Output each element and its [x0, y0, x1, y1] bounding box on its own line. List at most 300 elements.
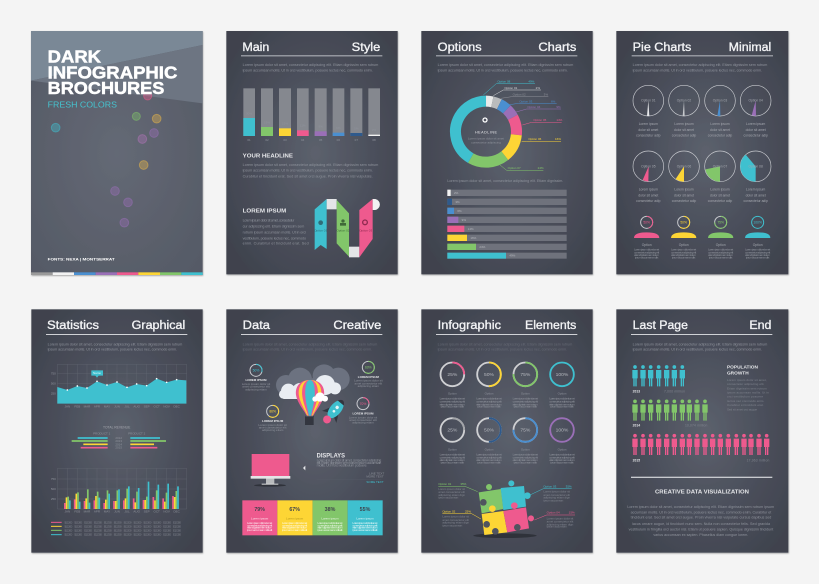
- displays text: Lorem ipsum dolor sit amet, consectetur adipiscing: [317, 459, 381, 463]
- intro text: [243, 63, 378, 73]
- displays text: MORE TEXT: [366, 475, 384, 479]
- ring row one text: consectetur adipiscing elit: [549, 400, 575, 404]
- population growth text: ipsum accumsan mollis. Ut in: [727, 390, 769, 394]
- ring row two text: consectetur adipiscing elit: [513, 455, 538, 459]
- heading: [631, 318, 772, 335]
- puzzle callouts: adipiscing etiam dign: [547, 522, 574, 526]
- gauge captions: consectetur adipiscing elit: [671, 250, 696, 254]
- colored stat boxes: consectetur adipiscing elit: [282, 523, 307, 527]
- bottom text: varius accumsan ex sapien. Phasellus diam congue lorem.: [653, 533, 748, 537]
- puzzle callouts: adipiscing etiam dign: [438, 493, 465, 497]
- grouped bar chart: SEP: [144, 510, 150, 514]
- intro text: Lorem ipsum dolor sit amet, consectetur adipiscing elit. Etiam dignissim sem rutrum: [438, 63, 573, 67]
- puzzle callouts: [438, 482, 575, 529]
- pie row two text: [636, 188, 768, 203]
- lorem ipsum block: Lorem ipsum dolor sit amet, consectetur: [243, 218, 295, 222]
- gauge callouts: amet consectetur elit: [355, 381, 382, 385]
- horizontal bars: 49%: [509, 254, 516, 258]
- ring row two text: Lorem ipsum dolor sit amet: [513, 453, 538, 457]
- gauge callouts: 86%: [269, 410, 276, 414]
- ring row two text: consectetur adipiscing elit: [476, 455, 502, 459]
- gauge captions: etiam dignissim sem rutrum: [634, 253, 660, 257]
- color strip: [31, 272, 203, 275]
- gauge captions: consectetur adipiscing elit: [634, 250, 659, 254]
- horizontal bars: 24%: [479, 245, 486, 249]
- colored stat boxes: consectetur adipiscing elit: [247, 523, 272, 527]
- pictogram row 2013: [632, 365, 685, 394]
- pie row one: Option 03: [713, 99, 727, 103]
- ring row two text: etiam dignissim sem rutrum: [440, 458, 465, 462]
- colored stat boxes: 38%: [325, 507, 336, 513]
- horizontal bars: 14%: [468, 227, 474, 231]
- ring row one: 25%: [447, 372, 458, 378]
- ring row two: [440, 418, 574, 442]
- leader labels: Option 06: [528, 137, 542, 141]
- ring row two text: Option: [448, 447, 457, 451]
- leader labels: Option 01: [504, 86, 518, 90]
- bokeh dots: [51, 92, 161, 227]
- pie row two text: Lorem ipsum: [674, 188, 694, 192]
- ring row one text: Option: [485, 392, 494, 396]
- ring row two: 75%: [520, 428, 531, 434]
- colored stat boxes: ipsum accumsan mollis elit: [282, 528, 307, 532]
- panel: main style: [226, 31, 398, 274]
- population growth text: Lorem ipsum dolor sit amet,: [727, 378, 767, 382]
- displays text: SOME TEXT: [366, 480, 384, 484]
- colored stat boxes: Lorem ipsum: [286, 517, 304, 521]
- bar chart: 2%: [372, 128, 376, 132]
- puzzle callouts: Option 04: [547, 511, 560, 515]
- leader labels: Option 07: [508, 166, 521, 170]
- ring row two text: Option: [521, 447, 530, 451]
- gauge captions: Lorem ipsum dolor sit amet: [634, 248, 659, 252]
- panel: cover: [31, 31, 203, 275]
- leader labels: 3%: [544, 93, 548, 97]
- ring row one text: Lorem ipsum dolor sit amet: [440, 397, 465, 401]
- gauge captions: etiam dignissim sem rutrum: [671, 253, 697, 257]
- bar chart: 03: [283, 138, 287, 142]
- grouped bar chart: OCT: [154, 510, 160, 514]
- heading: Infographic: [438, 318, 501, 332]
- ring row one: [440, 362, 574, 386]
- pie row one text: dolor sit amet: [638, 128, 658, 132]
- displays text: LINE TEXT: [369, 471, 384, 475]
- colored stat boxes: 79%: [254, 507, 265, 513]
- bar chart: 5%: [354, 126, 359, 130]
- puzzle callouts: amet consectetur elit: [547, 520, 573, 524]
- bar chart: 07: [355, 138, 358, 142]
- horizontal bars: 6%: [457, 209, 462, 213]
- cover subtitle: FRESH COLORS: [48, 99, 117, 109]
- colored stat boxes: 67%: [289, 507, 300, 513]
- bar chart: 08: [372, 138, 376, 142]
- lorem ipsum block: vestibulum, posuere lectus nec, commodo: [243, 236, 306, 240]
- leader labels: Option 05: [533, 118, 547, 122]
- data table: $12,300 $12,300 $12,300 $12,300 $12,300 $12,300 $12,300 $12,300 $12,300 $12,300 $12,300 $12,300: [64, 520, 181, 524]
- ribbon infographic: [314, 199, 380, 257]
- pictogram row 2015: 17,963 million: [747, 458, 769, 462]
- intro text: ipsum accumsan mollis. Ut in orci vestibulum, posuere lectus nec, commodo enim.: [438, 69, 568, 73]
- chart callout: Name: [93, 371, 101, 375]
- intro text: Lorem ipsum dolor sit amet, consectetur adipiscing elit. Etiam dignissim sem rutrum: [438, 342, 572, 346]
- gauge callouts: Lorem ipsum dolor sit: [258, 423, 287, 427]
- horizontal bars: [447, 190, 567, 259]
- heading: Minimal: [729, 40, 771, 54]
- pie row two text: dolor sit amet: [710, 193, 730, 197]
- puzzle callouts: Option 02: [442, 509, 456, 513]
- panel: pie charts minimal: [616, 31, 788, 274]
- gauge captions: Option: [753, 243, 763, 247]
- your headline: YOUR HEADLINE: [243, 153, 293, 159]
- leader lines: [483, 83, 562, 170]
- intro text: [633, 63, 767, 73]
- puzzle callouts: 15%: [569, 511, 575, 515]
- heading: Options: [438, 40, 482, 54]
- gauge callouts: LOREM IPSUM: [352, 411, 374, 415]
- ring row two text: ipsum accumsan mollis: [550, 461, 574, 465]
- colored stat boxes: etiam dignissim sem rutrum: [247, 526, 273, 530]
- your headline: ipsum accumsan mollis. Ut in orci vestibulum, posuere lectus nec, commodo enim.: [243, 169, 373, 173]
- bar chart: 30%: [246, 111, 252, 115]
- grouped bar chart: NOV: [163, 510, 170, 514]
- ribbon icons: Option 02: [337, 229, 350, 233]
- gauges on mounds: 50%: [643, 221, 650, 225]
- displays text: mollis. Ut in orci vestibulum posuere: [317, 464, 367, 468]
- lorem ipsum block: rutrum ipsum accumsan mollis. Ut in orci: [243, 230, 306, 234]
- ring row two text: Lorem ipsum dolor sit amet: [549, 453, 575, 457]
- colored stat boxes: Lorem ipsum: [251, 517, 269, 521]
- pie row one text: Lorem ipsum: [674, 122, 694, 126]
- gauges on mounds: 50%: [680, 221, 687, 225]
- pictogram row 2015: [632, 434, 769, 462]
- gauge callouts: Lorem ipsum dolor sit: [354, 379, 383, 383]
- panel: data creative: [226, 309, 398, 553]
- bottom text: tincidunt erat. Sed sit amet orci augue. Proin viverra nisi vulputate cursus dapibus sed: [631, 516, 771, 520]
- area chart: FEB: [74, 405, 80, 409]
- colored stat boxes: [242, 500, 383, 535]
- area chart: OCT: [154, 405, 160, 409]
- area chart: 750: [51, 372, 56, 376]
- pie row two: Option 07: [713, 164, 727, 168]
- grouped bar chart: MAY: [104, 510, 110, 514]
- ring row one text: ipsum accumsan mollis: [477, 405, 501, 409]
- gauge captions: ipsum accumsan mollis: [746, 256, 770, 260]
- colored stat boxes: etiam dignissim sem rutrum: [317, 526, 343, 530]
- ring row two text: ipsum accumsan mollis: [441, 461, 464, 465]
- lorem ipsum block: cur adipiscing elit. Etiam dignissim sem: [243, 224, 304, 228]
- population growth text: consectetur adipiscing elit.: [727, 382, 764, 386]
- bar chart: 01: [247, 138, 251, 142]
- colored stat boxes: Lorem ipsum: [356, 517, 374, 521]
- area chart: [51, 364, 187, 409]
- bottom heading: CREATIVE DATA VISUALIZATION: [655, 490, 749, 496]
- rocket: [317, 395, 350, 429]
- puzzle callouts: ipsum accumsan: [547, 525, 567, 529]
- area chart: DEC: [174, 405, 181, 409]
- gauge captions: ipsum accumsan mollis: [635, 256, 659, 260]
- clouds: [276, 364, 350, 399]
- heading: Main: [242, 40, 269, 54]
- ring row two text: etiam dignissim sem rutrum: [476, 458, 502, 462]
- ring row one text: etiam dignissim sem rutrum: [440, 402, 465, 406]
- population growth text: GROWTH: [727, 370, 749, 375]
- colored stat boxes: ipsum accumsan mollis elit: [352, 528, 378, 532]
- colored stat boxes: ipsum accumsan mollis elit: [317, 528, 343, 532]
- bar chart: 6%: [336, 126, 341, 130]
- population growth text: lectus nec commodo enim.: [727, 399, 764, 403]
- intro text: ipsum accumsan mollis. Ut in orci vestibulum, posuere lectus nec, commodo enim.: [438, 348, 567, 352]
- grouped bar chart: JUN: [114, 510, 120, 514]
- displays text: elit. Etiam dignissim sem rutrum ipsum accumsan: [317, 461, 381, 465]
- population growth text: [727, 365, 769, 411]
- population growth text: Curabitur et tincidunt erat.: [727, 403, 764, 407]
- heading: [632, 40, 773, 56]
- ribbon icons: [314, 219, 372, 233]
- pie row one text: Lorem ipsum: [710, 122, 730, 126]
- ring row one text: ipsum accumsan mollis: [441, 405, 464, 409]
- intro text: ipsum accumsan mollis. Ut in orci vestibulum, posuere lectus nec, commodo enim.: [243, 348, 372, 352]
- gauge callouts: [242, 361, 383, 432]
- cover title: INFOGRAPHIC: [48, 62, 178, 82]
- pictogram row 2015: 2015: [633, 458, 640, 462]
- intro text: [633, 342, 767, 352]
- gauge captions: etiam dignissim sem rutrum: [745, 253, 771, 257]
- bar chart: 05: [319, 138, 323, 142]
- pie row two text: dolor sit amet: [746, 193, 766, 197]
- puzzle callouts: ipsum accumsan: [442, 523, 463, 527]
- ring row one text: Lorem ipsum dolor sit amet: [549, 397, 575, 401]
- area chart: NOV: [163, 405, 170, 409]
- heading: Creative: [333, 318, 382, 332]
- gauge captions: Option: [642, 243, 652, 247]
- ring row one text: Lorem ipsum dolor sit amet: [513, 397, 538, 401]
- ring row one text: consectetur adipiscing elit: [440, 400, 465, 404]
- monitor: [251, 454, 290, 487]
- ring row one text: Lorem ipsum dolor sit amet: [476, 397, 502, 401]
- gauge captions: Lorem ipsum dolor sit amet: [708, 248, 733, 252]
- ribbon icons: Option 03: [359, 229, 372, 233]
- heading: Style: [352, 40, 381, 54]
- intro text: Lorem ipsum dolor sit amet, consectetur adipiscing elit. Etiam dignissim sem rutrum: [633, 63, 767, 67]
- ring row two text: [440, 447, 575, 465]
- gauge captions: [634, 243, 771, 260]
- bar chart: 9%: [319, 125, 323, 129]
- divider: [631, 477, 772, 478]
- bottom text: lacus ornare augue, id tincidunt nunc sem. Nulla non consectetur felis. Sed gravida: [632, 522, 771, 526]
- population growth text: orci vestibulum posuere: [727, 395, 763, 399]
- colored stat boxes: 55%: [360, 507, 371, 513]
- leader labels: 14%: [556, 118, 563, 122]
- colored stat boxes: Lorem ipsum dolor sit amet: [282, 521, 307, 525]
- bar chart: [243, 88, 380, 142]
- donut center: Lorem ipsum dolor sit amet: [468, 137, 504, 141]
- pie row two text: dolor sit amet: [638, 193, 658, 197]
- caption: Lorem ipsum dolor sit amet, consectetur adipiscing elit. Etiam dignissim.: [447, 179, 563, 183]
- ring row two text: etiam dignissim sem rutrum: [549, 458, 575, 462]
- ring row one: 100%: [556, 372, 569, 378]
- pie row one text: [636, 122, 768, 138]
- colored stat boxes: Lorem ipsum: [321, 517, 339, 521]
- ring row one text: Option: [521, 392, 530, 396]
- heading: End: [749, 318, 771, 332]
- pie row one: [633, 85, 771, 116]
- ring row one text: ipsum accumsan mollis: [514, 405, 537, 409]
- gauge callouts: 60%: [365, 366, 372, 370]
- pie row one text: dolor sit amet: [746, 128, 766, 132]
- bottom text: [627, 505, 774, 537]
- gauges on mounds: 75%: [717, 221, 724, 225]
- horizontal bars: 9%: [462, 218, 466, 222]
- bottom text: vestibulum in fringilla orci auctor nisi. Etiam ut posuere sapien. Quisque dignissim tincidunt: [629, 527, 773, 531]
- ring row one text: consectetur adipiscing elit: [513, 400, 538, 404]
- heading: Last Page: [633, 318, 688, 332]
- grouped bar chart: MAR: [84, 510, 91, 514]
- pie row two: Option 06: [677, 164, 691, 168]
- ring row one: 75%: [520, 372, 531, 378]
- puzzle callouts: 35%: [566, 484, 572, 488]
- leader labels: Option 03: [519, 99, 533, 103]
- area chart: MAY: [104, 405, 110, 409]
- intro text: [243, 342, 377, 352]
- cover title: [48, 46, 178, 98]
- colored stat boxes: consectetur adipiscing elit: [317, 523, 343, 527]
- panel: last page end: [616, 309, 788, 553]
- grouped bar chart: JUL: [124, 510, 130, 514]
- grouped bar chart: FEB: [74, 510, 80, 514]
- heading: Charts: [538, 40, 576, 54]
- intro text: [438, 63, 573, 73]
- leader labels: 2%: [536, 86, 540, 90]
- grouped bar chart: [51, 468, 187, 514]
- ring row one text: consectetur adipiscing elit: [476, 400, 502, 404]
- gauge captions: Option: [716, 243, 726, 247]
- bar chart: 04: [301, 138, 305, 142]
- grouped bar chart: APR: [94, 510, 101, 514]
- lorem ipsum block: [243, 209, 309, 246]
- pie row two text: Lorem ipsum: [746, 188, 766, 192]
- pie row one: Option 02: [677, 99, 691, 103]
- puzzle: [473, 480, 537, 538]
- donut center: HEADLINE: [475, 130, 498, 134]
- pie row one text: consectetur adip: [743, 134, 768, 138]
- pie row one text: consectetur adip: [636, 134, 661, 138]
- heading: [241, 40, 382, 56]
- data table: $12,300 $12,300 $12,300 $12,300 $12,300 $12,300 $12,300 $12,300 $12,300 $12,300 $12,300 $12,300: [64, 528, 181, 532]
- intro text: Lorem ipsum dolor sit amet, consectetur adipiscing elit. Etiam dignissim sem rutrum: [243, 63, 378, 67]
- bar chart: 02: [265, 138, 269, 142]
- intro text: ipsum accumsan mollis. Ut in orci vestibulum, posuere lectus nec, commodo enim.: [633, 348, 762, 352]
- ring row one text: etiam dignissim sem rutrum: [549, 402, 575, 406]
- gauge captions: Lorem ipsum dolor sit amet: [671, 248, 696, 252]
- gauge callouts: Lorem ipsum dolor sit: [349, 415, 377, 419]
- ring row one text: Option: [558, 392, 567, 396]
- pie row two: Option 08: [748, 164, 763, 168]
- gauge callouts: adipiscing etiam: [262, 428, 284, 432]
- butterfly chart: PRODUCT 1: [93, 431, 111, 435]
- area chart: JUL: [124, 405, 130, 409]
- gauge callouts: LOREM IPSUM: [262, 419, 284, 423]
- intro text: ipsum accumsan mollis. Ut in orci vestibulum, posuere lectus nec, commodo enim.: [633, 69, 762, 73]
- ring row two text: etiam dignissim sem rutrum: [513, 458, 538, 462]
- puzzle callouts: Lorem ipsum dolor sit: [438, 487, 465, 491]
- font credit: FONTS: NEXA | MONTSERRAT: [48, 258, 116, 262]
- intro text: Lorem ipsum dolor sit amet, consectetur adipiscing elit. Etiam dignissim sem rutrum: [243, 342, 377, 346]
- heading: [436, 40, 577, 56]
- gauge callouts: LOREM IPSUM: [245, 378, 267, 382]
- data table: [51, 520, 181, 537]
- grouped bar chart: AUG: [133, 510, 141, 514]
- intro text: Lorem ipsum dolor sit amet, consectetur adipiscing elit. Etiam dignissim sem rutrum: [633, 342, 767, 346]
- heading: Statistics: [47, 318, 99, 332]
- heading: [436, 318, 577, 335]
- puzzle callouts: Lorem ipsum dolor sit: [547, 516, 573, 520]
- pie row two: [633, 151, 771, 182]
- colored stat boxes: etiam dignissim sem rutrum: [282, 526, 308, 530]
- ring row two: 100%: [556, 428, 569, 434]
- puzzle callouts: amet consectetur elit: [442, 518, 469, 522]
- leader labels: 9%: [556, 105, 561, 109]
- puzzle callouts: amet consectetur elit: [543, 493, 570, 497]
- ring row two: 25%: [447, 428, 458, 434]
- grouped bar chart: 250: [51, 497, 56, 501]
- ring row one text: etiam dignissim sem rutrum: [476, 402, 502, 406]
- butterfly chart: 2015: [115, 446, 122, 450]
- gauge captions: consectetur adipiscing elit: [708, 250, 733, 254]
- ring row two text: consectetur adipiscing elit: [440, 455, 465, 459]
- ring row two text: ipsum accumsan mollis: [514, 461, 537, 465]
- horizontal bars: 2%: [454, 191, 459, 195]
- butterfly chart: 2013: [115, 439, 122, 443]
- ring row two text: consectetur adipiscing elit: [549, 455, 575, 459]
- gauge captions: Lorem ipsum dolor sit amet: [745, 248, 770, 252]
- ring row one text: [440, 392, 575, 409]
- bottom text: Lorem ipsum dolor sit amet, consectetur adipiscing elit. Etiam dignissim sem rutrum ipsum: [627, 505, 774, 509]
- gauge callouts: adipiscing etiam: [358, 384, 380, 388]
- leader labels: Option 08: [497, 79, 511, 83]
- data table: $12,300 $12,300 $12,300 $12,300 $12,300 $12,300 $12,300 $12,300 $12,300 $12,300 $12,300 $12,300: [64, 533, 181, 537]
- gauge captions: ipsum accumsan mollis: [672, 256, 696, 260]
- gauges on mounds: 100%: [753, 221, 762, 225]
- colored stat boxes: Lorem ipsum dolor sit amet: [317, 521, 343, 525]
- pie row one text: consectetur adip: [672, 134, 696, 138]
- bar chart: 15%: [282, 122, 288, 126]
- puzzle callouts: Option 01: [438, 482, 452, 486]
- data table: $12,300 $12,300 $12,300 $12,300 $12,300 $12,300 $12,300 $12,300 $12,300 $12,300 $12,300 $12,300: [64, 524, 181, 528]
- butterfly chart: 2014: [115, 442, 122, 446]
- population growth text: Etiam dignissim sem rutrum: [727, 386, 767, 390]
- bar chart: 06: [337, 138, 340, 142]
- intro text: ipsum accumsan mollis. Ut in orci vestibulum, posuere lectus nec, commodo enim.: [48, 348, 177, 352]
- colored stat boxes: etiam dignissim sem rutrum: [352, 526, 378, 530]
- grouped bar chart: 750: [51, 477, 56, 481]
- puzzle callouts: 35%: [460, 482, 467, 486]
- your headline: Curabitur et tincidunt erat. Sed sit amet orci augue. Proin viverra nisi vulputate.: [243, 174, 373, 178]
- pie row two text: Lorem ipsum: [710, 188, 730, 192]
- grouped bar chart: 500: [51, 487, 56, 491]
- bottom text: accumsan mollis. Ut in orci vestibulum, posuere lectus nec, commodo enim. Curabitur et: [631, 510, 771, 514]
- ring row two text: Lorem ipsum dolor sit amet: [440, 453, 465, 457]
- gauge callouts: adipiscing etiam: [245, 387, 267, 391]
- area chart: MAR: [84, 405, 91, 409]
- grouped bar chart: JAN: [65, 510, 70, 514]
- leader labels: [497, 79, 563, 170]
- your headline: Lorem ipsum dolor sit amet, consectetur adipiscing elit. Etiam dignissim sem rutrum: [243, 163, 378, 167]
- intro text: Lorem ipsum dolor sit amet, consectetur adipiscing elit. Etiam dignissim sem rutrum: [48, 342, 182, 346]
- gauge callouts: Lorem ipsum dolor sit: [242, 382, 270, 386]
- leader labels: 6%: [551, 99, 556, 103]
- puzzle callouts: adipiscing etiam dign: [543, 496, 570, 500]
- horizontal bars: 16%: [470, 236, 477, 240]
